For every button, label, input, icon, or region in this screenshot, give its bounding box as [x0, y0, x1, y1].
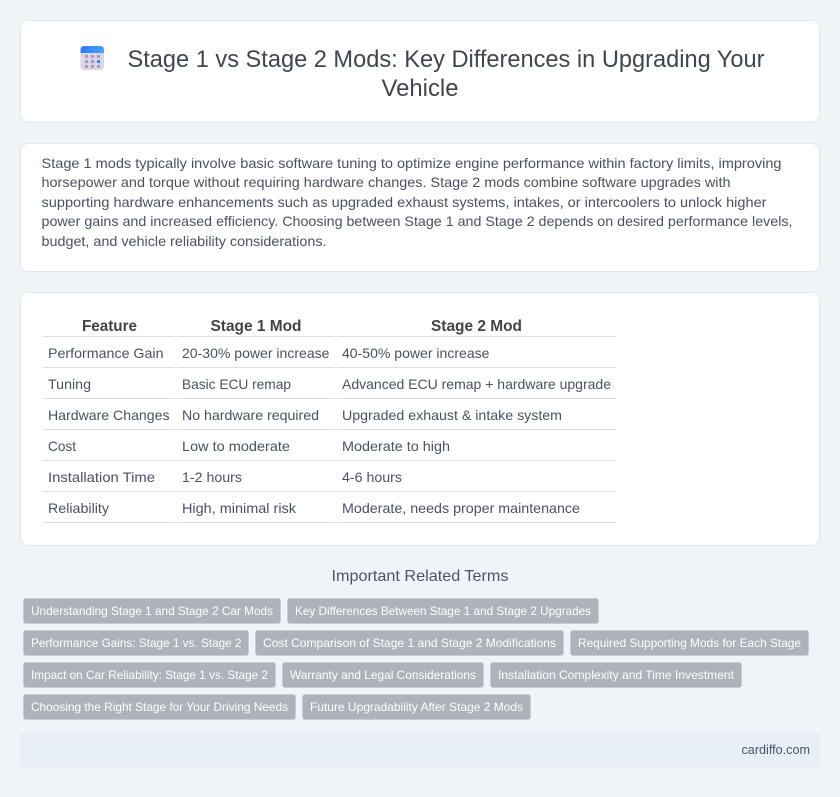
- panel: summary paragraph: horsepower and torque without requiring hardware changes. Stage 2 mods combine software upgrades with: [42, 174, 730, 190]
- related term tags: [24, 598, 808, 720]
- row: installation time: 1-2 hours: [182, 469, 242, 485]
- related term tags: Future Upgradability After Stage 2 Mods: [310, 700, 523, 714]
- row: cost: Moderate to high: [342, 438, 450, 454]
- related term tags: Understanding Stage 1 and Stage 2 Car Mods: [31, 604, 273, 618]
- related term tags: Installation Complexity and Time Investment: [498, 668, 735, 682]
- row: reliability: [48, 500, 580, 516]
- row: performance gain: 40-50% power increase: [342, 345, 490, 361]
- table header row: Stage 1 Mod: [210, 318, 302, 335]
- related term tags: Cost Comparison of Stage 1 and Stage 2 Modifications: [263, 636, 556, 650]
- row: hardware changes: Hardware Changes: [48, 407, 170, 423]
- row: reliability: Reliability: [48, 500, 109, 516]
- row: tuning: Tuning: [48, 376, 91, 392]
- row: installation time: Installation Time: [48, 469, 155, 485]
- row: reliability: Moderate, needs proper maintenance: [342, 500, 580, 516]
- footer: [20, 733, 820, 767]
- row: hardware changes: No hardware required: [182, 407, 319, 423]
- related term tags: Key Differences Between Stage 1 and Stage 2 Upgrades: [295, 604, 591, 618]
- panel: summary paragraph: budget, and vehicle reliability considerations.: [42, 233, 326, 249]
- row: cost: Cost: [48, 438, 76, 454]
- table header row: Stage 2 Mod: [431, 318, 522, 335]
- panel: header: [20, 20, 820, 122]
- related term tags: Impact on Car Reliability: Stage 1 vs. Stage 2: [31, 668, 268, 682]
- title: [128, 46, 765, 102]
- title: Vehicle: [382, 75, 458, 102]
- row: cost: Low to moderate: [182, 438, 290, 454]
- row: reliability: High, minimal risk: [182, 500, 297, 516]
- related term tags: Warranty and Legal Considerations: [290, 668, 476, 682]
- icon: calendar: [80, 46, 104, 70]
- table header row: Feature: [82, 318, 137, 335]
- row: hardware changes: [48, 407, 562, 423]
- table header row: [82, 318, 522, 335]
- footer: cardiffo.com: [742, 743, 810, 757]
- panel: comparison table: [20, 292, 820, 546]
- row: tuning: [48, 376, 611, 392]
- related term tags: Performance Gains: Stage 1 vs. Stage 2: [31, 636, 242, 650]
- row: installation time: 4-6 hours: [342, 469, 402, 485]
- row: performance gain: 20-30% power increase: [182, 345, 330, 361]
- row: performance gain: [48, 345, 490, 361]
- related term tags: Required Supporting Mods for Each Stage: [578, 636, 801, 650]
- row: hardware changes: Upgraded exhaust & intake system: [342, 407, 562, 423]
- panel: summary paragraph: power gains and increased efficiency. Choosing between Stage 1 and Stage 2 depends on desired performance levels,: [42, 213, 793, 229]
- row: cost: [48, 438, 450, 454]
- panel: summary paragraph: supporting hardware enhancements such as upgraded exhaust systems, intakes, or intercoolers to unlock higher: [42, 194, 767, 210]
- row: installation time: [48, 469, 402, 485]
- row: performance gain: Performance Gain: [48, 345, 164, 361]
- row: tuning: Advanced ECU remap + hardware upgrade: [342, 376, 611, 392]
- title: Stage 1 vs Stage 2 Mods: Key Differences in Upgrading Your: [128, 46, 765, 73]
- panel: summary paragraph: [20, 144, 820, 272]
- related term tags: Choosing the Right Stage for Your Driving Needs: [31, 700, 288, 714]
- heading: related terms: Important Related Terms: [332, 568, 508, 585]
- panel: summary paragraph: Stage 1 mods typically involve basic software tuning to optimize engine performance within factory limits, improving: [42, 155, 782, 171]
- row: tuning: Basic ECU remap: [182, 376, 291, 392]
